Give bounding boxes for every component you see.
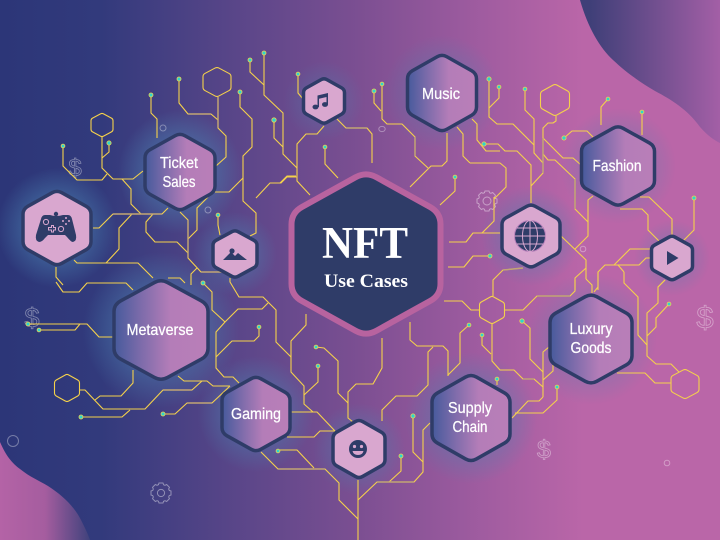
center hexagon: NFT Use Cases: [292, 174, 440, 334]
icon node: image: [213, 231, 257, 277]
icon node: play button: [652, 236, 692, 280]
icon node: game controller: [23, 191, 91, 265]
node: Gaming: Gaming: [231, 406, 281, 423]
node: Ticket Sales: [145, 134, 215, 210]
dollar sign: bottom: $: [537, 436, 551, 464]
node: Supply Chain: Chain: [452, 419, 488, 436]
icon node: globe: [502, 205, 560, 267]
node: Gaming: [222, 377, 290, 451]
node: Luxury Goods: Luxury: [570, 321, 612, 338]
node: Luxury Goods: [550, 295, 632, 383]
node: Metaverse: [114, 281, 208, 379]
dollar sign: left: $: [24, 303, 40, 333]
bottom-left corner blob: [0, 442, 90, 540]
center title: NFT: [322, 218, 408, 268]
node: Supply Chain: Supply: [448, 400, 492, 417]
node: Ticket Sales: Ticket: [160, 155, 199, 172]
node: Music: Music: [422, 86, 460, 103]
node: Metaverse: Metaverse: [126, 322, 194, 339]
icon node: music note: [304, 79, 344, 123]
gear icon: bottom: [151, 483, 171, 503]
muted trace segments: [113, 97, 575, 482]
node: Fashion: [582, 127, 654, 205]
top-right corner blob: [580, 0, 720, 143]
small circles: [8, 125, 670, 466]
node: Music: [408, 55, 476, 131]
outlined small hexagons: [54, 68, 699, 402]
node: Luxury Goods: Goods: [570, 340, 612, 357]
node: Supply Chain: [432, 376, 510, 460]
gear icon: right of center: [477, 191, 497, 211]
connection dots: [26, 51, 696, 458]
dollar sign: upper left: $: [68, 155, 82, 182]
dollar sign: right: $: [696, 300, 714, 335]
icon node: smiley: [333, 421, 385, 477]
node: Ticket Sales: Sales: [162, 174, 196, 191]
node: Fashion: Fashion: [592, 158, 642, 175]
center subtitle: Use Cases: [324, 271, 408, 292]
